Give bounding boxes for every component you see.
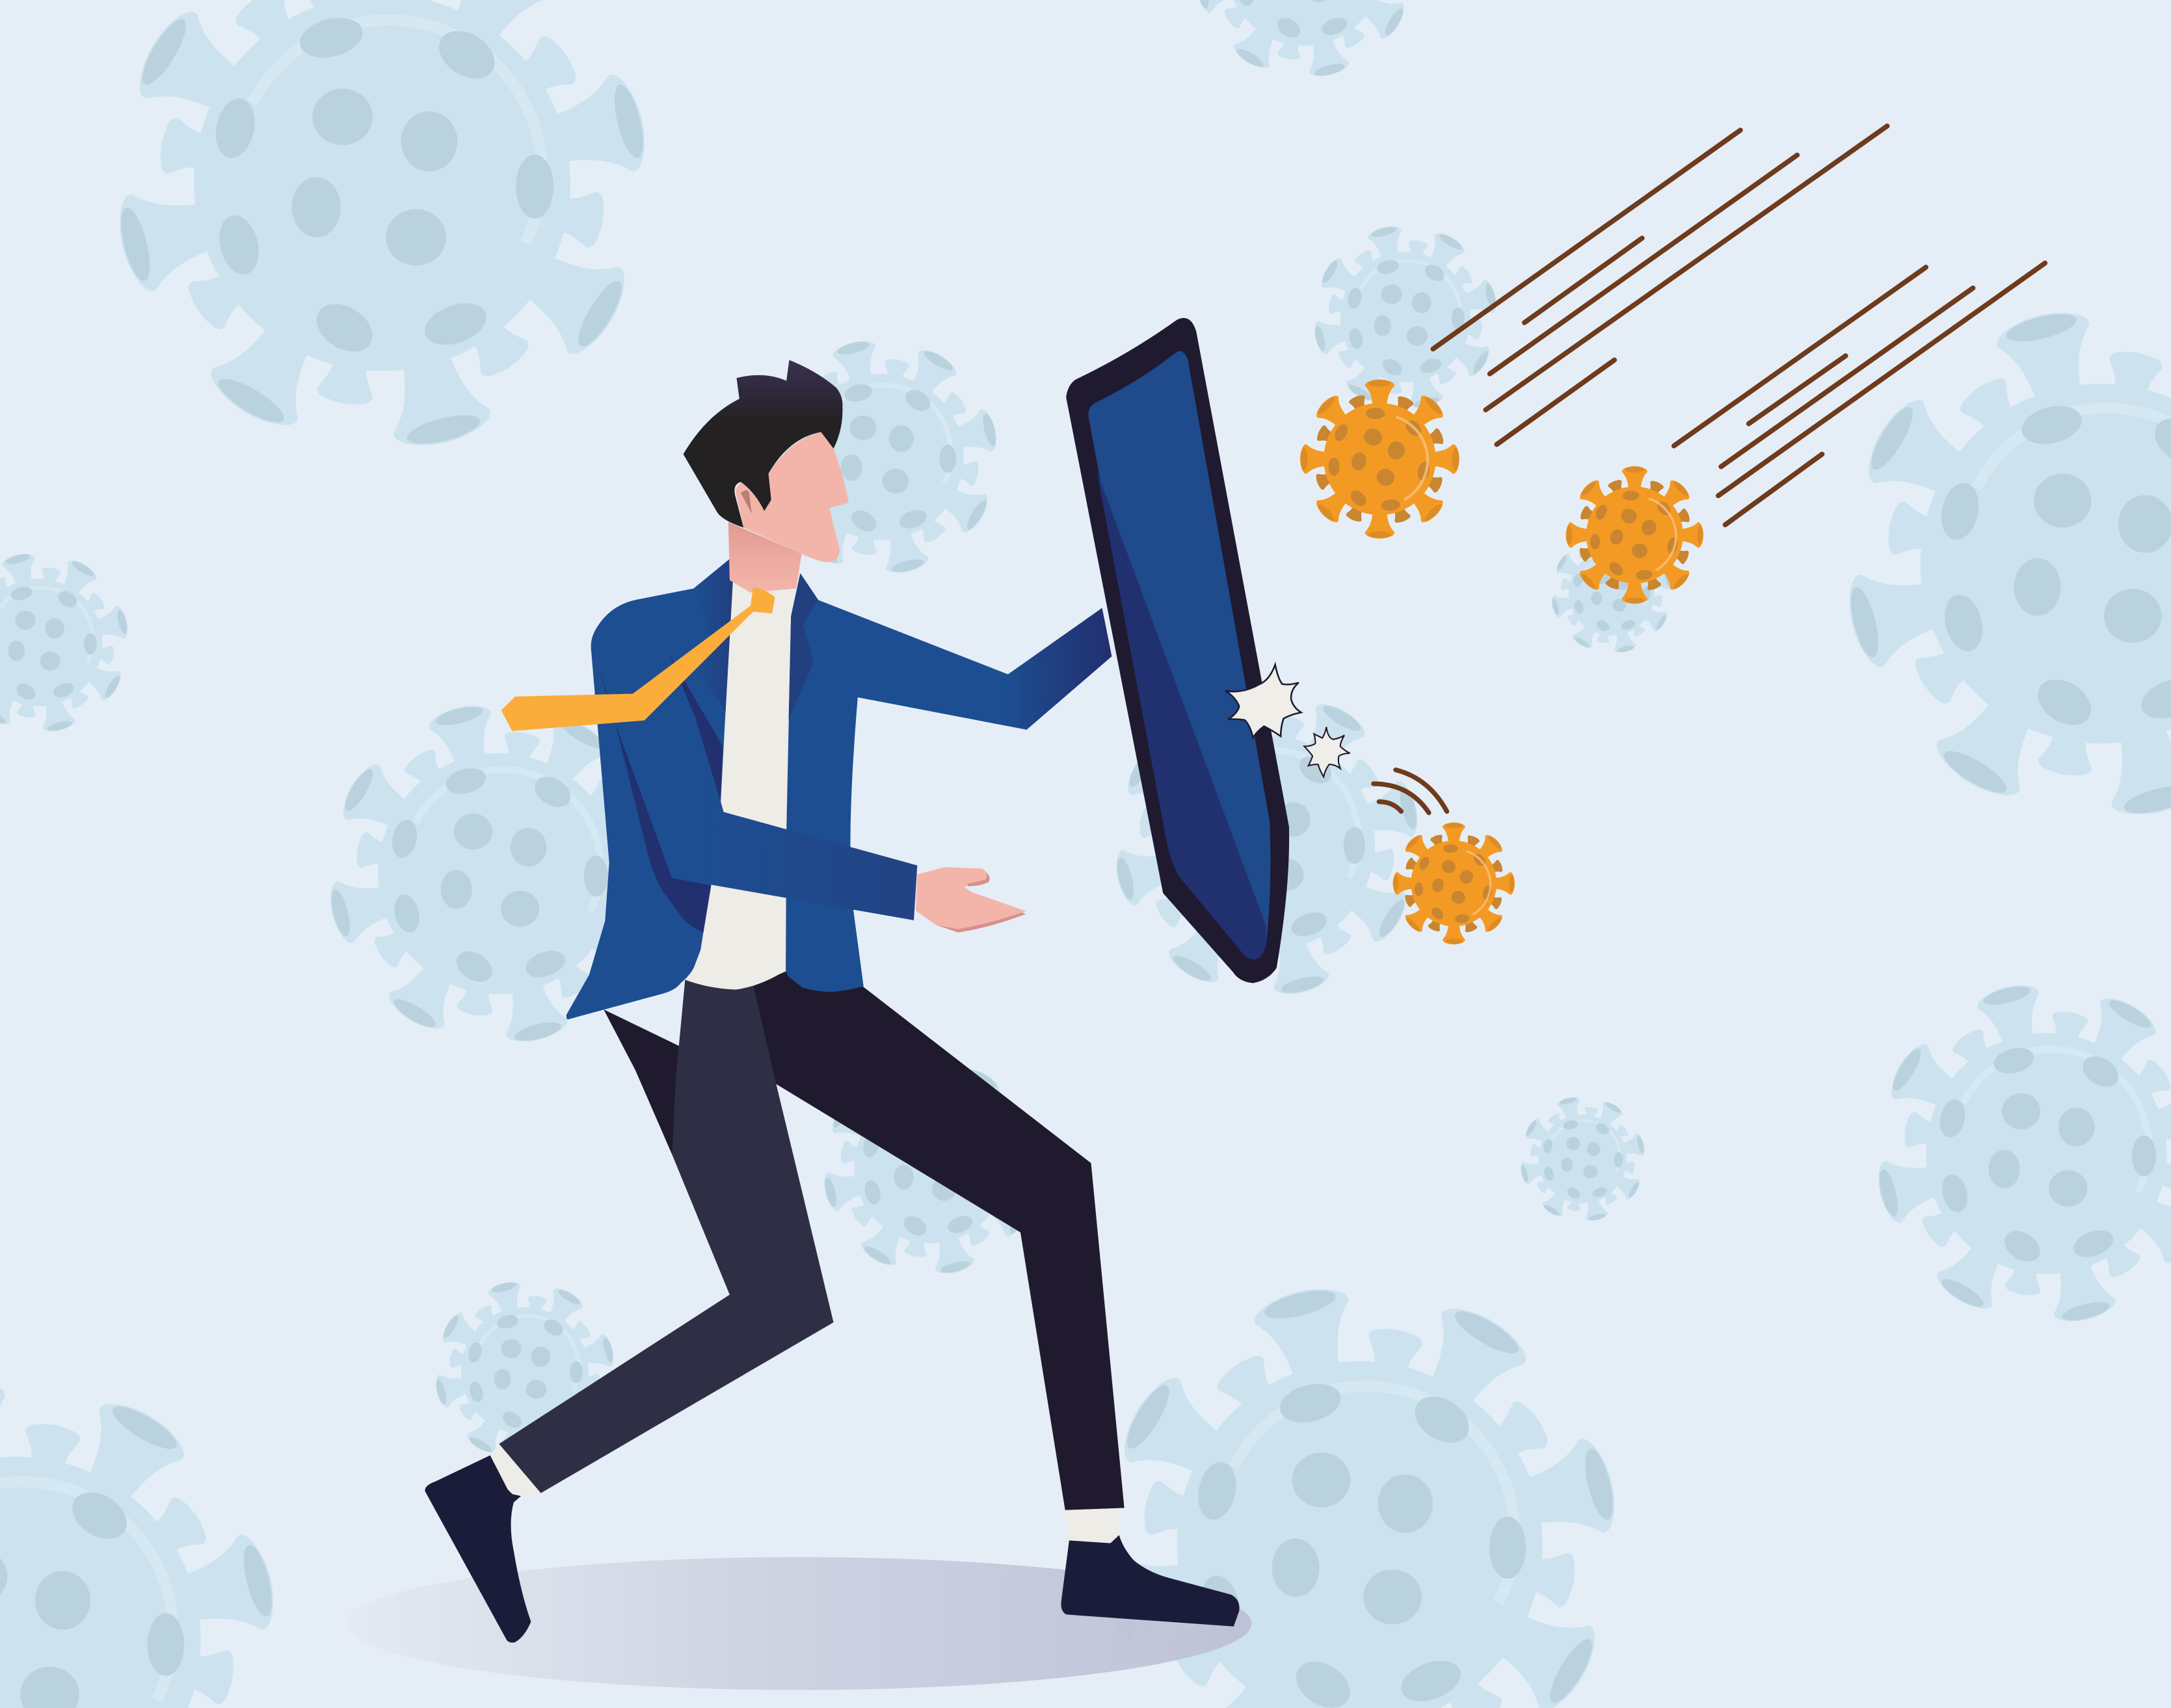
right lapel [789, 573, 818, 719]
virus behind leg [821, 1058, 1040, 1277]
motion lines group one [1433, 126, 1887, 444]
palm [916, 867, 1026, 929]
virus bottom right large [1096, 1281, 1623, 1708]
virus behind jacket [325, 700, 672, 1047]
shirt [685, 581, 797, 990]
jacket left panel [566, 557, 733, 1019]
virus right large [1841, 304, 2171, 823]
ground shadow [346, 1557, 1251, 1690]
sock back [490, 1444, 541, 1495]
shield [1066, 318, 1289, 983]
shield frame [1066, 318, 1289, 983]
virus top left [111, 0, 654, 454]
hair [684, 360, 842, 527]
shield face [1088, 351, 1270, 959]
virus small centre right [1519, 1095, 1646, 1223]
sock front [1065, 1508, 1119, 1543]
man [425, 360, 1240, 1642]
orange virus three [1379, 808, 1529, 959]
face [735, 432, 849, 562]
virus right lower [1872, 980, 2171, 1327]
back leg [604, 971, 1125, 1510]
near sleeve [615, 683, 917, 920]
virus behind shield [1111, 687, 1422, 999]
virus behind orange one [1312, 223, 1499, 411]
hand [916, 867, 1026, 933]
orange virus two [1550, 450, 1720, 620]
shoe back [425, 1455, 531, 1642]
virus bottom left [0, 1376, 282, 1708]
orange virus one [1282, 361, 1478, 557]
virus behind lower leg [433, 1279, 617, 1463]
hand shadow [936, 907, 1026, 933]
tie [501, 587, 775, 731]
front leg [499, 980, 834, 1493]
shoe front [1061, 1535, 1240, 1627]
bounce arcs [1374, 770, 1447, 813]
impact burst large [1225, 665, 1301, 738]
neck [728, 522, 802, 593]
thumb shadow [966, 868, 990, 886]
left lapel [694, 557, 733, 712]
virus left edge [0, 551, 131, 734]
shield shade [1097, 471, 1266, 959]
jacket right panel [786, 573, 1112, 992]
jacket left shade [600, 671, 711, 933]
ear inner [741, 490, 752, 514]
virus top centre [1192, 0, 1416, 80]
motion lines group two [1674, 263, 2045, 525]
virus under orange two [1550, 531, 1673, 654]
virus behind head [761, 337, 1000, 577]
impact burst small [1304, 727, 1350, 777]
shade under lapel [669, 654, 723, 802]
